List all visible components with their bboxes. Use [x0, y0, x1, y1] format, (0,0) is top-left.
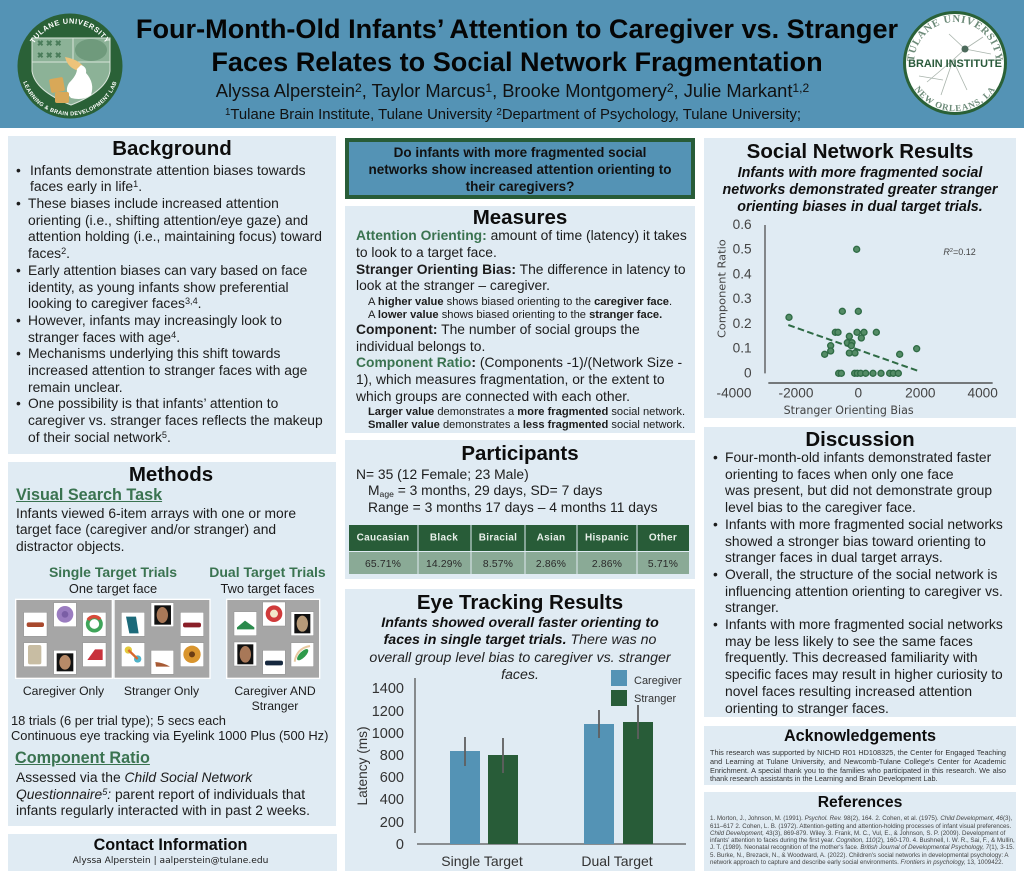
- panel: background: faces early in life1.: [30, 178, 142, 194]
- scatter plot: component ratio vs stranger orienting bias: 0.2: [733, 316, 752, 331]
- text: task description: [16, 505, 296, 554]
- text: trial details: 18 trials (6 per trial type); 5 secs each: [11, 713, 226, 728]
- affiliations: 1Tulane Brain Institute, Tulane University 2Department of Psychology, Tulane University;: [225, 107, 801, 123]
- panel: background: [8, 136, 336, 454]
- bar chart: latency: 1400: [372, 681, 404, 697]
- bullet list: background: [16, 162, 323, 445]
- panel: social network results: [704, 138, 1016, 418]
- subheading: visual search task: Visual Search Task: [16, 486, 162, 504]
- panel: discussion: stranger faces in dual target arrays.: [725, 549, 943, 565]
- text: sample description: Mage = 3 months, 29 days, SD= 7 days: [368, 482, 602, 499]
- scatter plot: component ratio vs stranger orienting bias: 0.6: [733, 217, 752, 232]
- label: single target trials: Single Target Trials: [49, 564, 177, 580]
- text: sample description: Range = 3 months 17 days – 4 months 11 days: [368, 499, 658, 515]
- stimulus arrays: [15, 598, 320, 679]
- label: caregiver only: Caregiver Only: [23, 684, 104, 698]
- label: two target faces: Two target faces: [221, 581, 314, 596]
- heading: social network results: Social Network Results: [747, 140, 973, 162]
- array: caregiver only: [16, 599, 112, 678]
- bar chart: latency: 1200: [372, 704, 404, 720]
- heading: participants: Participants: [461, 442, 579, 464]
- heading: eye tracking results: Eye Tracking Results: [417, 591, 623, 614]
- scatter plot: component ratio vs stranger orienting bias: 0.5: [733, 242, 752, 257]
- callout: research question: their caregivers?: [466, 179, 574, 194]
- text: references: J. T. (1989). Neonatal recognition of the mother's face. British Journal of Developmental Psychology, 7(1), 3-15.: [710, 844, 1014, 851]
- text: references: 5. Burke, N., Brezack, N., & Woodward, A. (2022). Children's social networks in developmental psychology: A: [710, 852, 1009, 859]
- panel: discussion: •: [713, 449, 718, 465]
- panel: discussion: [704, 427, 1016, 717]
- panel: background: •: [16, 195, 21, 211]
- scatter plot: component ratio vs stranger orienting bias: R: [943, 247, 950, 257]
- bar chart: latency: 0: [396, 837, 404, 853]
- panel: discussion: frequently. This decreased familiarity with: [725, 649, 978, 665]
- heading: methods: Methods: [129, 463, 213, 486]
- heading: background: Background: [112, 137, 232, 160]
- panel: discussion: Four-month-old infants demonstrated faster: [725, 449, 991, 465]
- text: component definitions: Component: The number of social groups the: [356, 321, 640, 337]
- scatter plot: component ratio vs stranger orienting bias: 0: [744, 366, 752, 381]
- panel: discussion: level bias to the caregiver face.: [725, 499, 916, 515]
- scatter plot: component ratio vs stranger orienting bias: 0.4: [733, 266, 752, 281]
- panel: background: •: [16, 345, 21, 361]
- logo: learning and brain development lab: TULANE UNIVERSITY: [30, 18, 110, 42]
- legend: Stranger: [634, 693, 677, 705]
- scatter plot: component ratio vs stranger orienting bias: Component Ratio: [715, 239, 728, 338]
- scatter plot: component ratio vs stranger orienting bias: 0: [855, 385, 863, 400]
- array: caregiver and stranger: [227, 599, 320, 678]
- panel: discussion: novel faces resulting increased attention: [725, 683, 972, 699]
- text: measures definitions: look at the stranger – caregiver.: [356, 277, 550, 293]
- text: sample description: N= 35 (12 Female; 23 Male): [356, 466, 529, 482]
- panel: discussion: •: [713, 616, 718, 632]
- logo: tulane brain institute: [903, 11, 1007, 115]
- logo: learning and brain development lab: ✖ ✖ ✖: [37, 51, 62, 60]
- logo: learning and brain development lab: [18, 14, 122, 118]
- table: demographics: 65.71%: [365, 559, 401, 570]
- legend: Caregiver: [634, 675, 682, 687]
- text: task description: Infants viewed 6-item arrays with one or more: [16, 505, 296, 521]
- text: eye tracking finding: [369, 615, 672, 683]
- panel: discussion: was present, but did not demonstrate group: [725, 482, 992, 498]
- text: task description: distractor objects.: [16, 538, 124, 554]
- panel: discussion: orienting to stranger faces.: [725, 700, 889, 716]
- text: social network finding: networks demonstrated greater stranger: [723, 182, 997, 198]
- text: measures definitions: [356, 227, 687, 293]
- scatter plot: component ratio vs stranger orienting bias: 0.1: [733, 341, 752, 356]
- panel: discussion: Infants with more fragmented social networks: [725, 616, 1003, 632]
- callout: research question: networks show increased attention orienting to: [368, 162, 672, 177]
- panel: background: faces2.: [28, 245, 70, 261]
- poster title: Four-Month-Old Infants’ Attention to Caregiver vs. Stranger: [136, 13, 898, 44]
- panel: background: However, infants may increasingly look to: [28, 312, 282, 328]
- text: acknowledgements: Enrichment. A special thank you to the families who participated in this research. We also: [710, 766, 1006, 775]
- panel: background: •: [16, 312, 21, 328]
- scatter plot: component ratio vs stranger orienting bias: 2: [950, 248, 953, 254]
- panel: contact information: [8, 834, 337, 871]
- text: trial details: Continuous eye tracking via Eyelink 1000 Plus (500 Hz): [11, 728, 328, 743]
- text: contact details: Alyssa Alperstein | aalperstein@tulane.edu: [73, 856, 268, 866]
- text: eye tracking finding: faces.: [501, 667, 539, 683]
- table: demographics: 14.29%: [426, 559, 462, 570]
- text: acknowledgements: [710, 748, 1006, 783]
- header banner: [0, 0, 1024, 128]
- panel: background: orienting (i.e., shifting attention/eye gaze) and: [28, 212, 308, 228]
- text: component definitions: [356, 321, 682, 404]
- heading: measures: Measures: [473, 206, 567, 229]
- panel: discussion: •: [713, 516, 718, 532]
- bar chart: latency: 200: [380, 815, 404, 831]
- heading: acknowledgements: Acknowledgements: [784, 727, 936, 745]
- panel: background: of their social network5.: [28, 429, 171, 445]
- bar chart: latency: Dual Target: [581, 853, 653, 869]
- scatter plot: component ratio vs stranger orienting bias: -4000: [717, 385, 752, 400]
- text: component definitions: 1), which measures fragmentation, or the extent to: [356, 371, 665, 387]
- panel: discussion: orienting to faces when only one face: [725, 466, 954, 482]
- logo: tulane brain institute: TULANE UNIVERSITY: [907, 15, 1003, 61]
- panel: eye tracking results: [345, 589, 695, 871]
- text: fragmentation value notes: Larger value demonstrates a more fragmented social network.: [368, 406, 685, 418]
- panel: background: identity, as young infants show preferential: [28, 278, 289, 294]
- heading: references: References: [818, 794, 902, 811]
- text: references: 1. Morton, J., Johnson, M. (1991). Psychol. Rev. 98(2), 164. 2. Cohen, et al. (1975). Child Development, 46(3),: [710, 815, 1012, 822]
- array: stranger only: [114, 599, 210, 678]
- text: acknowledgements: thank research assistants in the Learning and Brain Development Lab.: [710, 774, 938, 783]
- text: bias value notes: A lower value shows biased orienting to the stranger face.: [368, 309, 662, 321]
- panel: background: Early attention biases can vary based on face: [28, 262, 307, 278]
- text: fragmentation value notes: [368, 406, 685, 431]
- panel: measures: [345, 206, 695, 433]
- text: measures definitions: to look to a target face.: [356, 244, 497, 260]
- scatter plot: component ratio vs stranger orienting bias: 2000: [905, 385, 936, 400]
- scatter plot: component ratio vs stranger orienting bias: [715, 217, 998, 417]
- text: social network finding: orienting biases in dual target trials.: [737, 199, 983, 215]
- panel: participants: [345, 440, 695, 579]
- table: demographics: Hispanic: [585, 532, 629, 544]
- text: social network finding: [722, 165, 998, 215]
- panel: references: [704, 792, 1016, 871]
- text: component definitions: Component Ratio: (Components -1)/(Network Size -: [356, 354, 682, 370]
- label: caregiver and stranger: Caregiver AND: [234, 684, 316, 698]
- panel: background: increased attention to stranger faces with age: [28, 362, 307, 378]
- panel: background: One possibility is that infants’ attention to: [28, 395, 278, 411]
- label: dual target trials: Dual Target Trials: [209, 564, 326, 580]
- bar chart: latency: 400: [380, 792, 404, 808]
- bar chart: latency: 800: [380, 748, 404, 764]
- text: references: Child Development, 43(3), 869-879. Wiley. 3. Frank, M. C., Vul, E., & Johnson, S. P. (2009). Development of: [710, 830, 1005, 837]
- text: component ratio description: Assessed via the Child Social Network: [16, 769, 252, 785]
- poster title: Faces Relates to Social Network Fragmentation: [211, 46, 823, 77]
- text: acknowledgements: This research was supported by NICHD R01 HD108325, the Center for Engaged Teaching: [710, 748, 1006, 757]
- bar chart: latency: [355, 670, 686, 869]
- text: component definitions: individual belongs to.: [356, 338, 485, 354]
- authors: Alyssa Alperstein2, Taylor Marcus1, Brooke Montgomery2, Julie Markant1,2: [216, 80, 809, 101]
- table: demographics: Caucasian: [357, 532, 409, 544]
- bar chart: latency: Latency (ms): [355, 726, 370, 806]
- logo: learning and brain development lab: LEARNING & BRAIN DEVELOPMENT LAB: [23, 81, 116, 116]
- text: fragmentation value notes: Smaller value demonstrates a less fragmented social network.: [368, 419, 685, 431]
- scatter plot: component ratio vs stranger orienting bias: -2000: [779, 385, 814, 400]
- text: component ratio description: [16, 769, 310, 818]
- label: stranger only: Stranger Only: [124, 684, 199, 698]
- panel: discussion: Overall, the structure of the social network is: [725, 566, 997, 582]
- scatter plot: component ratio vs stranger orienting bias: 4000: [967, 385, 998, 400]
- panel: background: caregiver vs. stranger faces reflects the makeup: [28, 412, 323, 428]
- panel: acknowledgements: [704, 726, 1016, 785]
- label: caregiver and stranger: [234, 684, 316, 712]
- text: bias value notes: [368, 296, 672, 321]
- logo: learning and brain development lab: ✖ ✖ ✖: [37, 39, 62, 48]
- scatter plot: component ratio vs stranger orienting bias: 0.3: [733, 291, 752, 306]
- text: social network finding: Infants with more fragmented social: [738, 165, 982, 181]
- table: demographics: Other: [649, 532, 677, 544]
- panel: discussion: specific faces may result in higher curiosity to: [725, 666, 1003, 682]
- text: component definitions: which groups are connected with each other.: [356, 388, 630, 404]
- panel: background: •: [16, 162, 21, 178]
- table: demographics: Asian: [537, 532, 565, 544]
- legend: [611, 670, 682, 706]
- text: references: network approach to capture and describe early social environments. Frontiers in psychology, 13, 1009422.: [710, 859, 1003, 866]
- panel: background: remain unclear.: [28, 379, 123, 395]
- text: trial details: [11, 713, 328, 743]
- panel: discussion: Infants with more fragmented social networks: [725, 516, 1003, 532]
- text: bias value notes: A higher value shows biased orienting to the caregiver face.: [368, 296, 672, 308]
- table: demographics: Black: [430, 532, 458, 544]
- heading: discussion: Discussion: [805, 428, 915, 451]
- panel: background: attention holding (i.e., maintaining focus) toward: [28, 228, 322, 244]
- panel: background: •: [16, 262, 21, 278]
- scatter plot: component ratio vs stranger orienting bias: Stranger Orienting Bias: [784, 403, 914, 417]
- bar chart: latency: Single Target: [441, 853, 523, 869]
- panel: background: Infants demonstrate attention biases towards: [30, 162, 306, 178]
- text: acknowledgements: and Learning at Tulane University, and Newcomb-Tulane College's Center for Academic: [710, 757, 1006, 766]
- panel: background: stranger faces with age4.: [28, 329, 180, 345]
- text: component ratio description: Questionnaire5: parent report of individuals that: [16, 786, 305, 802]
- text: references: infants' attention to faces during the first year. Cognition, 110(2), 160-170. 4. Bushnell, I. W. R., Sai, F., & Mullin,: [710, 837, 1015, 844]
- text: eye tracking finding: Infants showed overall faster orienting to: [381, 615, 659, 631]
- table: demographics: 8.57%: [483, 559, 513, 570]
- logo: tulane brain institute: NEW ORLEANS, LA: [914, 86, 995, 112]
- panel: background: These biases include increased attention: [28, 195, 279, 211]
- text: component ratio description: infants regularly interacted with in past 2 weeks.: [16, 802, 310, 818]
- table: demographics: [349, 525, 689, 574]
- panel: discussion: stranger.: [725, 599, 779, 615]
- panel: discussion: influencing attention orienting to caregiver vs.: [725, 583, 1003, 599]
- panel: background: Mechanisms underlying this shift towards: [28, 345, 280, 361]
- table: demographics: 2.86%: [536, 559, 566, 570]
- table: demographics: Biracial: [479, 532, 517, 544]
- bar chart: latency: 1000: [372, 726, 404, 742]
- label: caregiver and stranger: Stranger: [252, 698, 298, 712]
- label: one target face: One target face: [69, 581, 157, 596]
- subheading: component ratio: Component Ratio: [15, 749, 150, 767]
- panel: background: •: [16, 395, 21, 411]
- bar chart: latency: 600: [380, 770, 404, 786]
- text: eye tracking finding: overall group level bias to caregiver vs. stranger: [369, 650, 671, 666]
- panel: discussion: •: [713, 566, 718, 582]
- text: task description: target face (caregiver and/or stranger) and: [16, 521, 276, 537]
- panel: discussion: may be less likely to see the same faces: [725, 633, 973, 649]
- text: measures definitions: Attention Orienting: amount of time (latency) it takes: [356, 227, 687, 243]
- table: demographics: 5.71%: [648, 559, 678, 570]
- poster title: [136, 13, 898, 77]
- text: references: 611–617 2. Cohen, L. B. (1972). Attention-getting and attention-holding processes of infant visual preferences.: [710, 823, 1011, 830]
- text: sample description: [356, 466, 658, 515]
- text: references: [710, 815, 1015, 866]
- bullet list: discussion: [713, 449, 1003, 716]
- panel: discussion: showed a stronger bias toward orienting to: [725, 533, 986, 549]
- table: demographics: 2.86%: [592, 559, 622, 570]
- logo: tulane brain institute: BRAIN INSTITUTE: [908, 58, 1002, 70]
- text: eye tracking finding: faces in single target trials. There was no: [384, 632, 656, 648]
- callout: research question: [345, 138, 695, 199]
- panel: methods: [8, 462, 336, 826]
- scatter plot: component ratio vs stranger orienting bias: =0.12: [953, 247, 976, 257]
- callout: research question: Do infants with more fragmented social: [394, 145, 646, 160]
- panel: background: looking to caregiver faces3,4.: [28, 295, 202, 311]
- text: measures definitions: Stranger Orienting Bias: The difference in latency to: [356, 261, 686, 277]
- heading: contact: Contact Information: [94, 836, 247, 854]
